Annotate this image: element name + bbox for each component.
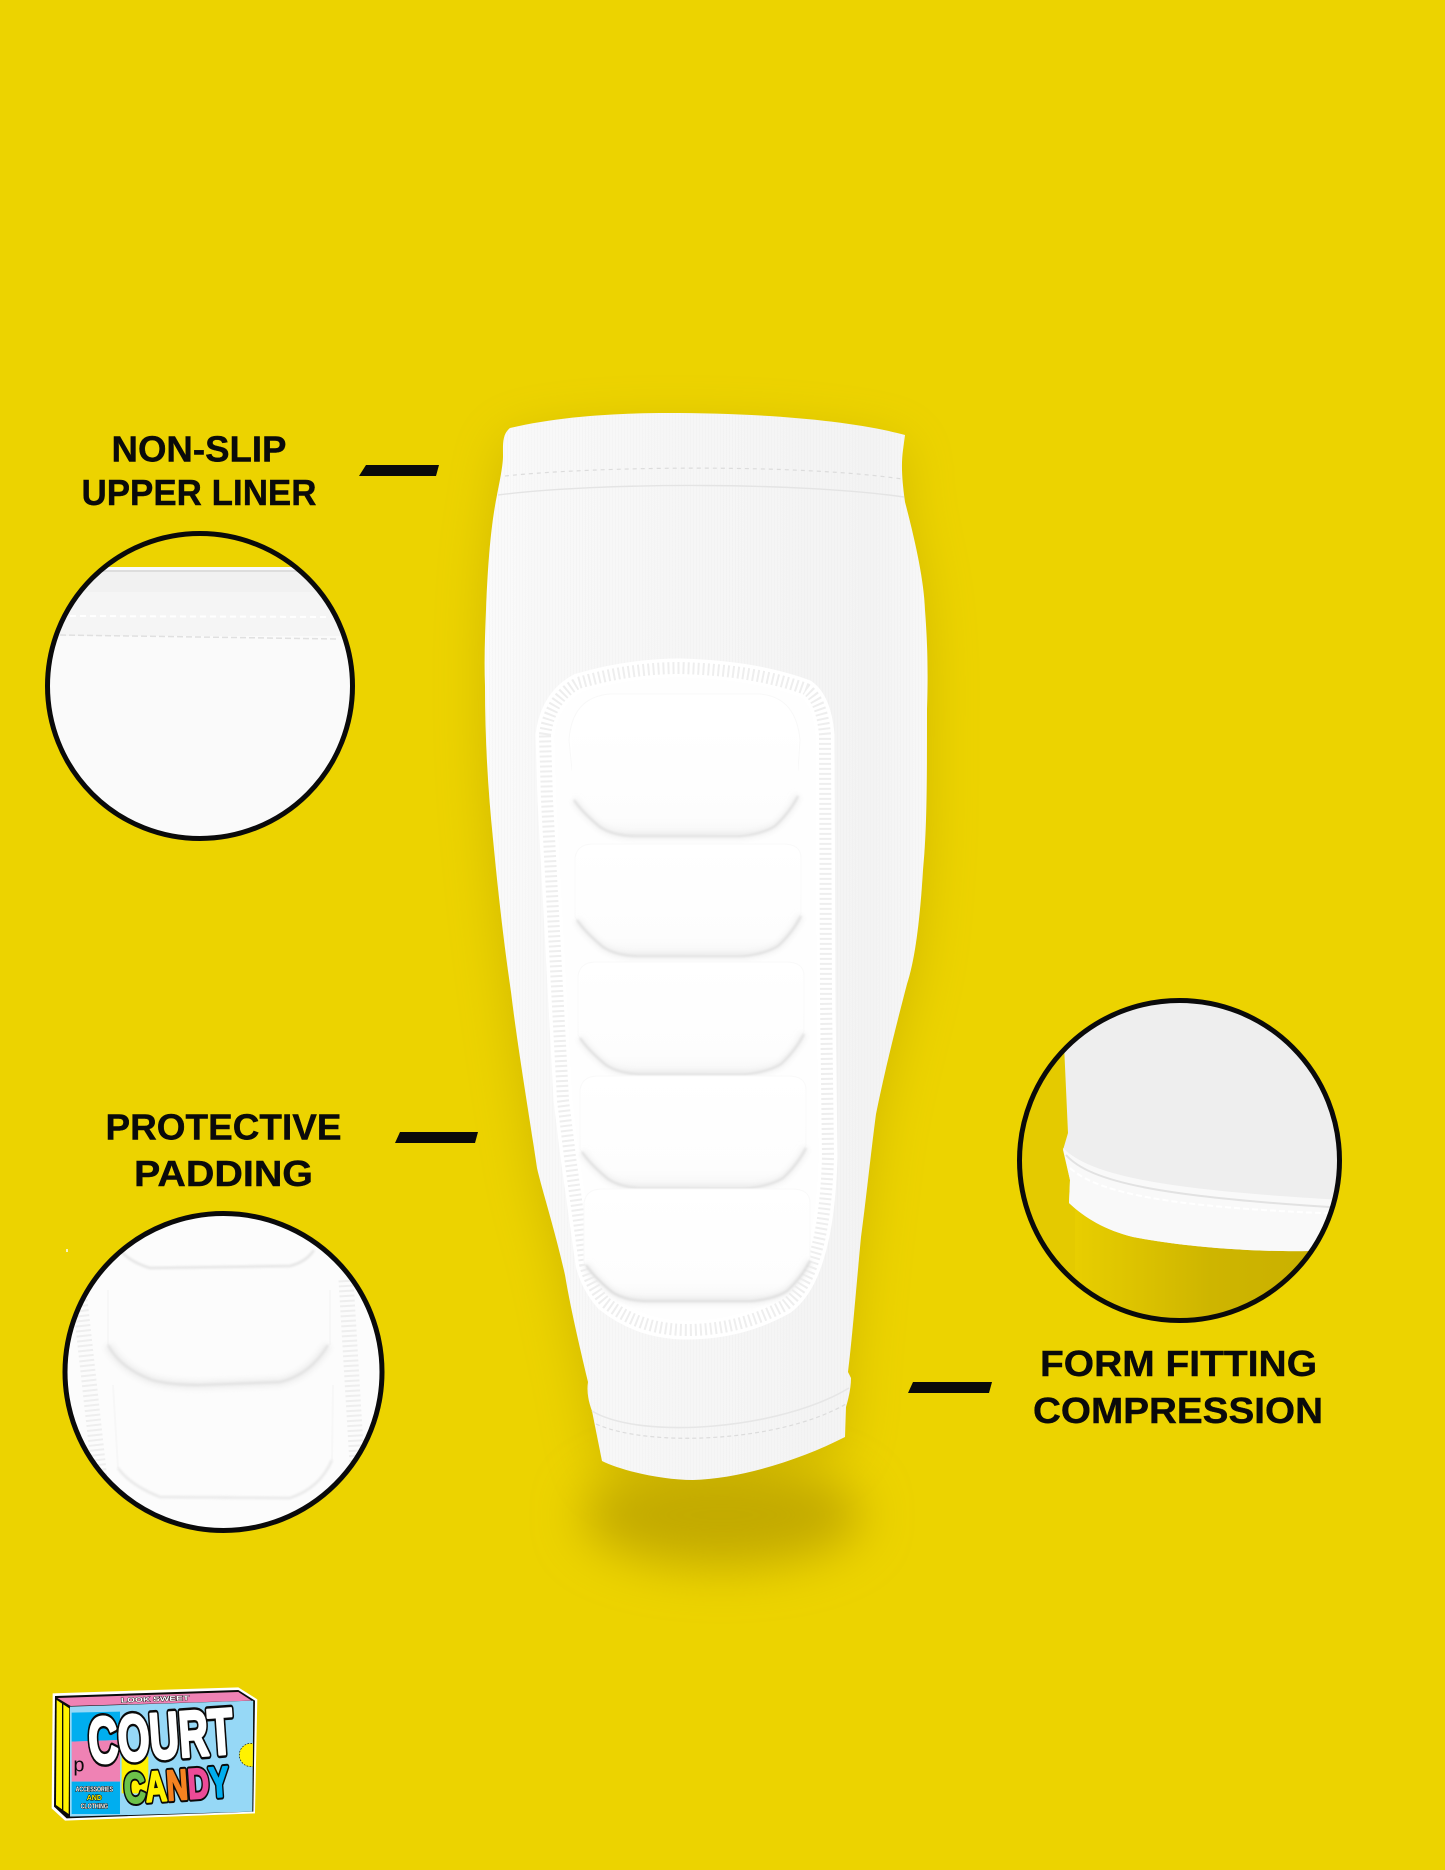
pointer dash — [395, 1132, 478, 1143]
speck — [66, 1249, 68, 1252]
detail circle: upper liner — [40, 530, 360, 847]
pad segment 2 — [575, 844, 801, 956]
box spine — [56, 1700, 69, 1814]
box top — [57, 1692, 252, 1706]
heading: non-slip upper liner — [82, 428, 316, 513]
logo text: candy: CANDY — [122, 1758, 230, 1813]
product: padded compression sleeve — [485, 413, 928, 1480]
logo text: look sweet: LOOK SWEET — [121, 1695, 189, 1705]
logo: Court Candy box — [52, 1687, 263, 1821]
cast shadow under sleeve — [485, 427, 928, 1567]
box front — [70, 1700, 263, 1817]
heading: form fitting compression — [1033, 1343, 1323, 1431]
infographic canvas — [45, 413, 1342, 1821]
callout: protective padding — [60, 1106, 478, 1535]
padding panel — [545, 668, 828, 1330]
pad segment 4 — [580, 1076, 806, 1188]
heading: non-slip upper liner: UPPER LINER — [82, 472, 316, 513]
sleeve body — [485, 413, 928, 1480]
detail circle: padding — [60, 1210, 390, 1535]
heading: non-slip upper liner: NON-SLIP — [112, 428, 286, 470]
heading: form fitting compression: FORM FITTING — [1040, 1343, 1317, 1384]
lower hem stitching — [592, 1388, 849, 1438]
pad segment 1 — [569, 694, 800, 836]
box front: p — [73, 1755, 84, 1777]
logo text: candy: CANDY — [122, 1758, 230, 1813]
heading: protective padding — [106, 1106, 342, 1194]
pointer dash — [908, 1382, 992, 1393]
logo text: accessories and clothing: ACCESSORIES — [76, 1786, 113, 1793]
pad segment 5 — [584, 1189, 810, 1301]
heading: protective padding: PROTECTIVE — [106, 1106, 342, 1148]
logo text: court — [86, 1694, 236, 1777]
upper liner stitching — [498, 468, 904, 497]
box outline — [52, 1687, 257, 1821]
heading: form fitting compression: COMPRESSION — [1033, 1390, 1323, 1431]
logo text: accessories and clothing — [76, 1786, 113, 1811]
logo text: accessories and clothing: CLOTHING — [81, 1804, 108, 1811]
detail circle: lower hem — [1015, 995, 1345, 1325]
pad segment 3 — [578, 962, 804, 1074]
pointer dash — [359, 465, 439, 476]
heading: protective padding: PADDING — [134, 1153, 313, 1194]
logo text: court: COURT — [86, 1694, 236, 1777]
callout: non-slip upper liner — [40, 428, 439, 847]
logo text: court: COURT — [86, 1694, 236, 1777]
callout: form fitting compression — [908, 995, 1345, 1431]
logo text: accessories and clothing: AND — [87, 1795, 102, 1802]
